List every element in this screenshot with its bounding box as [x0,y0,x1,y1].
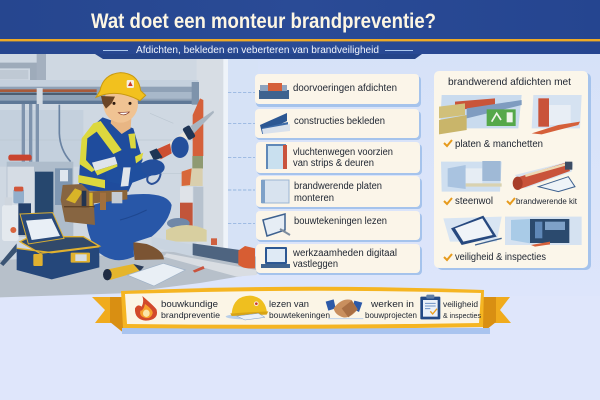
caulk gun [151,127,194,160]
icon: flame [135,296,157,321]
helmet [96,73,146,101]
wall [0,40,258,277]
pipes and cable tray [0,80,199,163]
text: bouwkundige brandpreventie [161,299,220,320]
card: werkzaamheden digitaal: werkzaamheden digitaal [292,248,397,259]
header [0,0,600,59]
card: bouwtekeningen lezen: bouwtekeningen lezen [294,216,387,227]
icon: handshake [326,299,363,319]
icon: checklist clipboard [420,295,440,319]
icon: drawing and magnifier [263,214,290,236]
text: lezen van bouwtekeningen: bouwtekeningen [269,310,330,320]
title: Wat doet een monteur brandpreventie? [91,9,436,33]
worker [61,73,214,260]
belt [80,190,127,205]
illustration: fire-resistant sealant [513,162,575,192]
arm and reflective stripe [113,167,152,177]
panel heading: brandwerend afdichten met [448,76,571,88]
card: brandwerende platen [256,176,422,209]
card: werkzaamheden digitaal: vastleggen [293,259,338,270]
subtitle ribbon [95,54,422,59]
hi-vis vest [79,121,122,172]
equipment cabinet [7,155,73,237]
illustration: tablet [443,216,502,245]
card: brandwerende platen: brandwerende platen [294,181,382,192]
illustration: electrical cabinet [505,217,582,247]
text: bouwkundige brandpreventie: bouwkundige [161,299,218,310]
card: vluchtenwegen: van strips & deuren [293,158,374,169]
card: doorvoeringen afdichten: doorvoeringen afdichten [293,83,397,94]
tool case [17,213,99,279]
pipes on floor [152,237,257,277]
torso [79,117,143,192]
card: vluchtenwegen: vluchtenwegen voorzien [293,147,393,158]
subtitle: Afdichten, bekleden en veberteren van brandveiligheid [136,45,379,56]
text: werken in bouwprojecten [365,299,417,320]
icon: sealed duct [259,83,289,99]
boot [133,242,164,260]
text: veiligheid & inspecties: & inspecties [443,311,481,320]
card: brandwerende platen: monteren [294,193,334,204]
text: werken in bouwprojecten: bouwprojecten [365,310,417,320]
card: constructies bekleden: constructies bekleden [294,116,385,127]
text: bouwkundige brandpreventie: brandpreventie [161,310,220,320]
gloves [141,159,165,175]
drawing on floor [127,263,185,286]
item: steenwol: steenwol [455,195,493,207]
tool pouch [61,184,95,225]
icon: plate [261,180,289,203]
text: lezen van bouwtekeningen [269,299,330,320]
item: brandwerende kit: brandwerende kit [516,196,578,206]
bottles [0,187,31,266]
item: platen & manchetten: platen & manchetten [455,138,543,150]
duct top left [0,40,46,80]
illustration: plates and sleeves [439,95,582,134]
icon: laptop [261,247,290,268]
text: veiligheid & inspecties: veiligheid [443,299,478,309]
banner tails [92,297,511,334]
illustration: stone wool [441,161,502,192]
fire seal on wall [166,98,207,242]
icon: clad beam [260,113,290,134]
face [111,113,132,134]
task cards [255,74,422,275]
card: doorvoeringen afdichten [255,74,421,107]
panel: brandwerend afdichten met [434,71,591,270]
item: veiligheid & inspecties: veiligheid & inspecties [455,251,546,263]
card: constructies bekleden [255,109,421,140]
card: werkzaamheden digitaal [256,244,422,275]
icon: door [266,144,287,169]
yellow tool on floor [103,264,144,280]
text: lezen van bouwtekeningen: lezen van [269,299,309,310]
card: vluchtenwegen [256,142,422,175]
scene: worker illustration [0,40,258,297]
legs [86,194,172,260]
text: werken in bouwprojecten: werken in [370,299,414,310]
card: bouwtekeningen lezen [256,211,422,242]
icon: helmet with drawings [226,296,268,320]
banner [121,287,484,329]
illustrations in panel [439,95,582,247]
floor [0,252,258,297]
text: veiligheid & inspecties [443,299,481,320]
